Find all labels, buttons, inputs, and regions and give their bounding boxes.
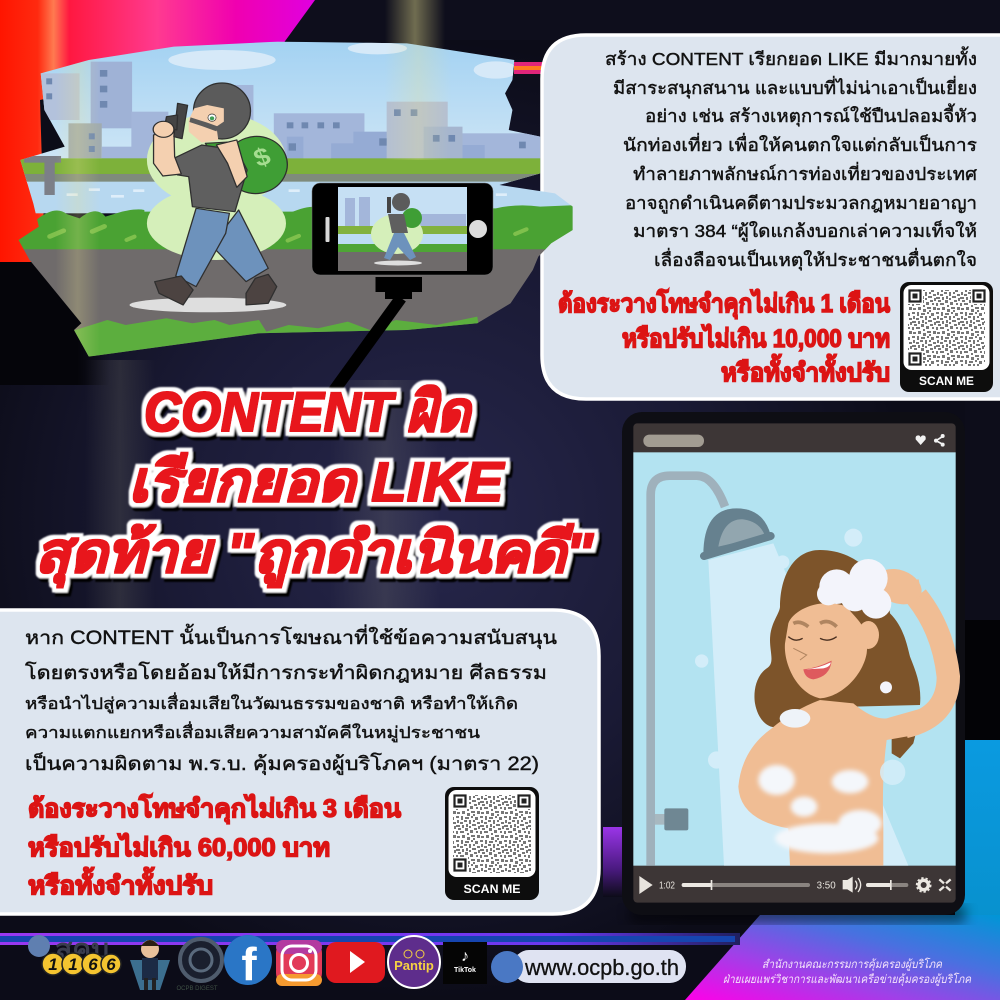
road: [0, 249, 580, 356]
icon: TikTok: TikTok: [454, 967, 476, 974]
player top bar icons: [643, 434, 945, 447]
body text: โดยตรงหรือโดยอ้อมให้มีการกระทำผิดกฎหมาย ศีลธรรม: [25, 661, 547, 684]
player control bar: 1:02: [659, 881, 675, 892]
penalty text: หรือปรับไม่เกิน 10,000 บาท: [622, 323, 890, 353]
body text: [605, 46, 977, 271]
face opening: [189, 105, 224, 143]
shirt: [174, 145, 247, 212]
illustration: street scene with robber: [0, 30, 580, 363]
body text: ความแตกแยกหรือเสื่อมเสียความสามัคคีในหมู่ประชาชน: [25, 721, 480, 743]
hand: [153, 121, 174, 137]
footer agency credit: ฝ่ายเผยแพร่วิชาการและพัฒนาเครือข่ายคุ้มครองผู้บริโภค: [723, 972, 972, 986]
hotline logo: 1: [48, 955, 58, 974]
video frame: [633, 423, 956, 903]
selfie stick: [333, 298, 401, 392]
hotline logo: 6: [88, 955, 98, 974]
penalty text: หรือทั้งจำทั้งปรับ: [721, 353, 890, 387]
QR code: SCAN ME: [464, 884, 521, 896]
water bubble on shoulder: [880, 760, 905, 785]
icon: Facebook: [224, 935, 272, 990]
tablet video player: [622, 412, 965, 915]
icon: TikTok: [443, 942, 487, 984]
icon: YouTube: [326, 942, 385, 983]
penalty text: หรือทั้งจำทั้งปรับ: [28, 866, 213, 900]
body text: หาก CONTENT นั้นเป็นการโฆษณาที่ใช้ข้อความสนับสนุน: [25, 624, 557, 650]
footer agency credit: สำนักงานคณะกรรมการคุ้มครองผู้บริโภค: [762, 957, 943, 971]
footer agency credit: [723, 957, 972, 986]
body text: เลื่องลือจนเป็นเหตุให้ประชาชนตื่นตกใจ: [654, 248, 977, 271]
icon: Pantip: Pantip: [394, 958, 434, 973]
title: [35, 380, 594, 588]
dollar sign on bag: $: [249, 141, 275, 173]
phone screen: [338, 187, 467, 271]
robber figure: [153, 83, 298, 305]
arms: [154, 130, 247, 187]
body text: หรือนำไปสู่ความเสื่อมเสียในวัฒนธรรมของชาติ หรือทำให้เกิด: [25, 692, 518, 714]
shoes: [155, 274, 277, 305]
shower: [651, 476, 908, 866]
hotline logo: [28, 934, 121, 975]
hotline logo: สคบ.: [55, 934, 117, 964]
balaclava: [194, 83, 250, 139]
lower grass: [74, 316, 478, 356]
tablet shadow: [630, 905, 965, 923]
ground shadow: [130, 298, 286, 312]
icon: TikTok: ♪: [461, 948, 469, 965]
jeans: [176, 208, 268, 287]
panel: tourism prank warning: [542, 35, 1000, 399]
panel: misleading advertising warning: [0, 610, 599, 914]
icon: Facebook: f: [241, 938, 257, 990]
hotline logo: 6: [106, 955, 116, 974]
body text: สร้าง CONTENT เรียกยอด LIKE มีมากมายทั้ง: [605, 46, 977, 69]
body text: มีสาระสนุกสนาน และแบบที่ไม่น่าเอาเป็นเยี่ยง: [613, 76, 977, 99]
icon: Pantip: [388, 936, 440, 988]
OCPB logo: OCPB DIGEST: [176, 986, 218, 992]
gun: [165, 103, 188, 139]
mascot icon: [130, 940, 170, 990]
player control bar: 3:50: [817, 881, 836, 892]
player control bar: [639, 876, 951, 894]
phone showing the scene: [312, 183, 493, 299]
woman: [738, 550, 948, 866]
website pill: [491, 950, 686, 983]
body text: ทำลายภาพลักษณ์การท่องเที่ยวของประเทศ: [633, 162, 977, 184]
hotline logo: 1: [68, 955, 78, 974]
OCPB logo: [176, 939, 222, 992]
body text: นักท่องเที่ยว เพื่อให้คนตกใจแต่กลับเป็นการ: [623, 133, 977, 155]
footer logos: [28, 934, 686, 992]
penalty text: ต้องระวางโทษจำคุกไม่เกิน 1 เดือน: [558, 288, 890, 320]
body text: มาตรา 384 “ผู้ใดแกล้งบอกเล่าความเท็จให้: [633, 220, 977, 242]
grass verge: [0, 205, 580, 250]
title: เรียกยอด LIKE: [128, 450, 505, 513]
river and banks: [0, 156, 580, 213]
body foam: [780, 709, 810, 728]
body text: [25, 624, 557, 776]
QR code: [900, 282, 993, 392]
title: สุดท้าย "ถูกดำเนินคดี": [35, 521, 594, 588]
light green blob behind figure: [147, 113, 286, 260]
city buildings: [41, 62, 540, 160]
penalty text: [558, 288, 890, 387]
icon: Instagram: [276, 940, 322, 986]
money bag: [205, 127, 298, 203]
penalty text: ต้องระวางโทษจำคุกไม่เกิน 3 เดือน: [28, 793, 401, 825]
body text: อาจถูกดำเนินคดีตามประมวลกฎหมายอาญา: [625, 193, 977, 214]
sky: [20, 42, 540, 184]
bubbles: [695, 529, 862, 769]
title: CONTENT ผิด: [144, 380, 473, 443]
hair foam: [817, 559, 892, 693]
eye: [208, 114, 216, 121]
website pill: www.ocpb.go.th: [524, 955, 679, 980]
body text: อย่าง เช่น สร้างเหตุการณ์ใช้ปืนปลอมจี้หัว: [645, 103, 977, 127]
penalty text: หรือปรับไม่เกิน 60,000 บาท: [28, 832, 330, 862]
body text: เป็นความผิดตาม พ.ร.บ. คุ้มครองผู้บริโภคฯ (มาตรา 22): [25, 751, 539, 776]
penalty text: [28, 793, 401, 900]
QR code: SCAN ME: [919, 376, 974, 388]
QR code: [445, 787, 539, 900]
light beams over scene: [56, 40, 451, 360]
